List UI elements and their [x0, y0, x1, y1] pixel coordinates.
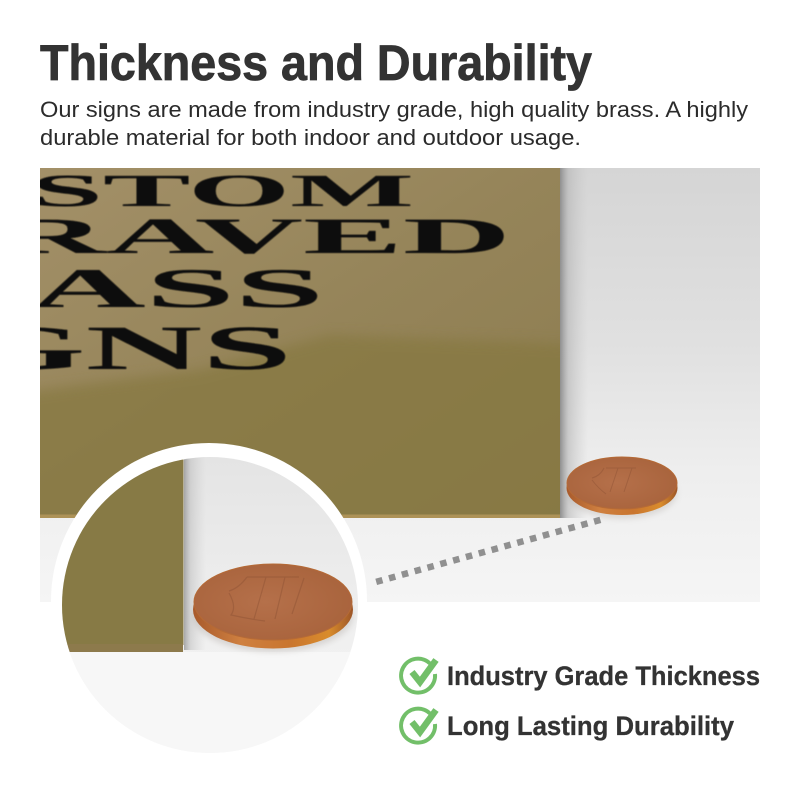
- engraved sign lettering: STOM: [30, 165, 414, 216]
- engraved sign lettering: RAVED: [0, 209, 511, 265]
- icon: large penny: [193, 564, 353, 652]
- checklist item: industry grade thickness: Industry Grade Thickness: [447, 661, 760, 691]
- engraved sign lettering: ASS: [30, 258, 324, 320]
- description text: durable material for both indoor and outdoor usage.: [40, 125, 581, 150]
- panel: product photo: [0, 165, 760, 602]
- title: Thickness and Durability: [40, 35, 592, 91]
- dotted connector line: [376, 520, 600, 582]
- icon: small penny: [566, 457, 678, 519]
- engraved sign lettering: [40, 174, 504, 370]
- brass plate: [40, 168, 560, 518]
- icon: green check: [401, 659, 436, 693]
- description text: [40, 97, 748, 150]
- callout: zoomed inset circle: [51, 443, 367, 759]
- checklist item: long lasting durability: Long Lasting Durability: [447, 711, 734, 741]
- description text: Our signs are made from industry grade, high quality brass. A highly: [40, 97, 748, 122]
- brass sheet edge: [60, 455, 184, 652]
- icon: green check: [401, 709, 436, 743]
